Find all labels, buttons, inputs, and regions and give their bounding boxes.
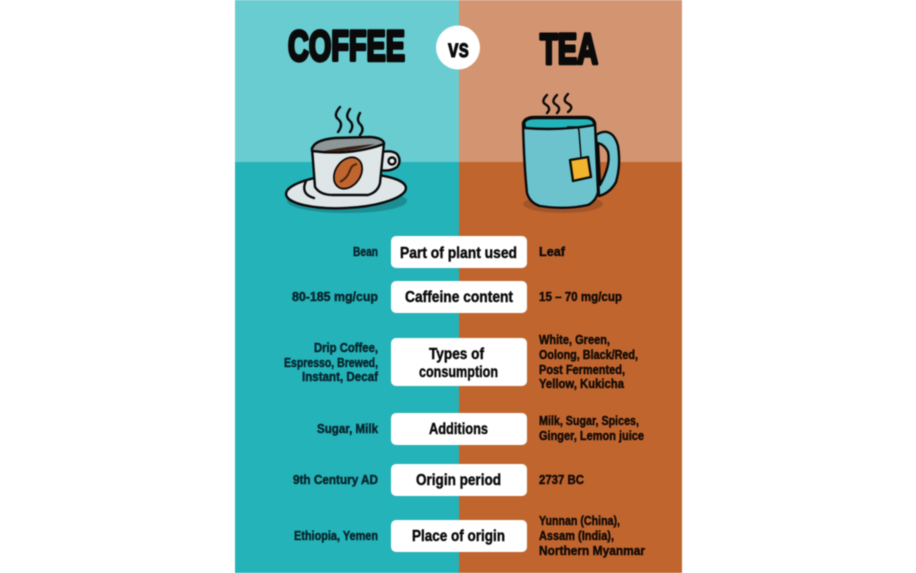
row: caffeine content: Caffeine content — [405, 289, 514, 306]
row: types of consumption: Yellow, Kukicha — [539, 377, 625, 391]
row: caffeine content — [292, 281, 622, 313]
vs badge: vs — [448, 33, 469, 63]
row: part of plant used: Bean — [353, 245, 378, 259]
row: types of consumption: White, Green, — [539, 333, 610, 347]
title: tea: TEA — [540, 26, 598, 74]
row: caffeine content: 80-185 mg/cup — [292, 290, 378, 304]
row: additions — [317, 413, 644, 445]
row: place of origin: Ethiopia, Yemen — [294, 529, 378, 543]
row: types of consumption: Types of — [429, 346, 485, 363]
row: additions: Milk, Sugar, Spices, — [539, 414, 639, 428]
row: types of consumption: Oolong, Black/Red, — [539, 348, 638, 362]
row: part of plant used: Part of plant used — [400, 245, 517, 262]
row: place of origin — [294, 514, 645, 558]
title: coffee: COFFEE — [288, 22, 405, 70]
row: types of consumption: Drip Coffee, — [314, 341, 378, 355]
icon: tea mug — [523, 94, 619, 213]
row: types of consumption: Instant, Decaf — [302, 370, 379, 384]
vs badge — [436, 26, 480, 70]
row: place of origin: Assam (India), — [539, 529, 614, 543]
row: origin period — [293, 464, 584, 496]
row: part of plant used — [353, 236, 566, 268]
row: place of origin: Place of origin — [412, 528, 505, 545]
row: additions: Ginger, Lemon juice — [539, 429, 644, 443]
background panels — [235, 0, 682, 573]
icon: coffee cup — [285, 107, 407, 213]
row: place of origin: Northern Myanmar — [539, 544, 645, 558]
row: origin period: Origin period — [416, 472, 501, 489]
row: caffeine content: 15 – 70 mg/cup — [539, 290, 622, 304]
row: place of origin: Yunnan (China), — [539, 514, 620, 528]
row: additions: Sugar, Milk — [317, 422, 378, 436]
row: types of consumption: consumption — [419, 364, 498, 381]
row: types of consumption: Espresso, Brewed, — [284, 356, 378, 370]
row: origin period: 9th Century AD — [293, 473, 378, 487]
row: additions: Additions — [429, 421, 488, 438]
row: origin period: 2737 BC — [539, 473, 584, 487]
row: types of consumption — [284, 333, 638, 391]
row: types of consumption: Post Fermented, — [539, 363, 625, 377]
row: part of plant used: Leaf — [539, 245, 566, 259]
